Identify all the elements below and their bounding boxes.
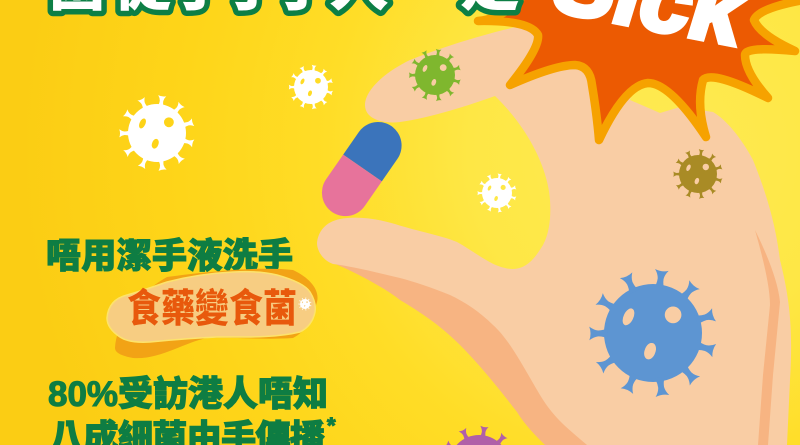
icon: small white virus — [289, 65, 333, 109]
icon: brown virus — [673, 149, 722, 199]
statistic text — [48, 375, 336, 445]
callout: medicine becomes germs — [107, 269, 318, 358]
title — [47, 0, 520, 18]
icon: green virus — [409, 49, 461, 101]
callout: medicine becomes germs: 食藥變食菌 — [127, 287, 297, 331]
icon: white virus between fingers — [477, 173, 516, 213]
icon: large white virus — [119, 95, 194, 171]
starburst badge — [478, 0, 800, 140]
icon: purple virus — [440, 426, 518, 445]
hand illustration — [317, 26, 791, 445]
capsule pill — [313, 113, 411, 225]
heading: do not use hand wash: 唔用潔手液洗手 — [46, 237, 293, 276]
statistic text: 80%受訪港人唔知 — [48, 375, 328, 414]
icon: blue virus — [589, 269, 716, 397]
statistic text: * — [327, 413, 336, 438]
